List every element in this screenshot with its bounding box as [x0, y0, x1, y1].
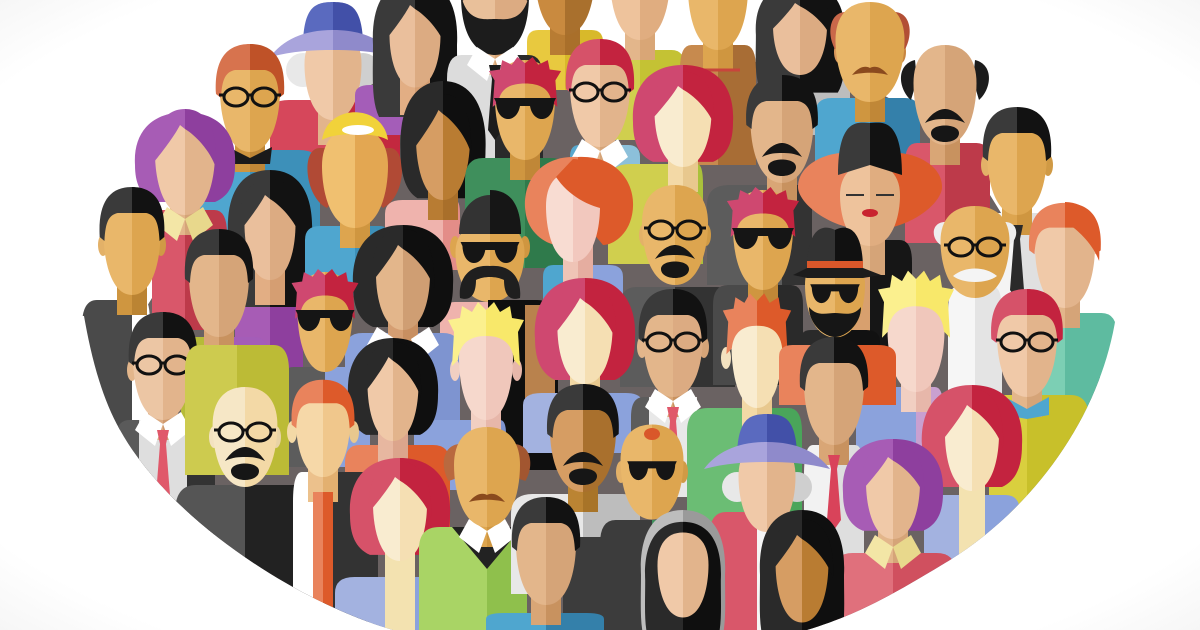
person: bearded man in suit, top [447, 0, 543, 175]
person: red hair woman right [922, 385, 1022, 585]
person: glasses man red tie [631, 289, 715, 497]
person: purple haired woman [135, 109, 235, 330]
person: black hair goatee man [707, 75, 818, 285]
person: bald man goatee glasses black sweater [175, 387, 317, 625]
person: woman long black hair top [355, 0, 457, 135]
person: purple hair woman lower right [835, 439, 955, 630]
person: woman gray scarf bottom [641, 510, 725, 630]
person: black hair man left [181, 229, 254, 419]
person: red hair woman bottom [335, 458, 465, 630]
person: blue hat man white hair [704, 414, 830, 630]
person: blonde man right [856, 270, 954, 448]
person: red hair woman center [523, 278, 643, 453]
person: orange shirt man black hair [779, 337, 896, 595]
person: red hair sunglasses, left [289, 269, 370, 467]
person: black hat red band man [794, 228, 881, 345]
person: red bob woman [608, 65, 733, 264]
person: red haired man glasses [200, 44, 320, 240]
person: glasses man in suit, far left [115, 312, 215, 540]
person: top tan man [612, 0, 682, 140]
person: bald sunglasses man [600, 424, 688, 630]
person: top brown man [527, 0, 603, 90]
person: bald man with dark beard [901, 45, 990, 243]
person: big orange hat woman [798, 123, 942, 350]
person: red hair glasses man yellow shirt [989, 289, 1089, 515]
person: black hair man blue shirt bottom [486, 497, 604, 630]
person: top man orange [680, 0, 756, 165]
person: orange hair man green shirt [687, 293, 802, 528]
person: man black hair far left in suit [82, 187, 166, 430]
person: woman long black hair left [228, 170, 312, 375]
person: woman brown skin bottom [760, 510, 844, 630]
person: white haired old man [934, 206, 1016, 394]
person: bald man with mustache [815, 2, 920, 183]
person: bald goatee man with glasses [620, 185, 735, 387]
person: red hair glasses, blue shirt [566, 39, 640, 168]
person: black hair woman center left [345, 225, 460, 423]
person: black cap mustache man [440, 190, 530, 336]
person: red hair sunglasses, center [713, 187, 803, 385]
person: man black hair right [981, 107, 1053, 313]
person: woman with black hair, top right [756, 0, 850, 135]
person: bald mustache man green sweater [419, 427, 530, 630]
person: black hair goatee man white shirt [511, 384, 640, 630]
person: blonde man black jacket [414, 300, 558, 490]
person: orange hair woman teal shirt [1029, 202, 1117, 423]
person: woman black curly hair [385, 81, 486, 270]
person: orange curly hair woman [524, 156, 634, 299]
person: red hair sunglasses man, green shirt [465, 57, 565, 268]
person: yellow shirt behind bald man [185, 345, 289, 475]
person: black hair woman red-orange top [345, 338, 450, 535]
person: man yellow cap [305, 112, 402, 296]
person: hat with white hair [270, 2, 400, 170]
person: brown jacket strip [525, 305, 555, 398]
person: red hair man orange tie [287, 380, 378, 622]
